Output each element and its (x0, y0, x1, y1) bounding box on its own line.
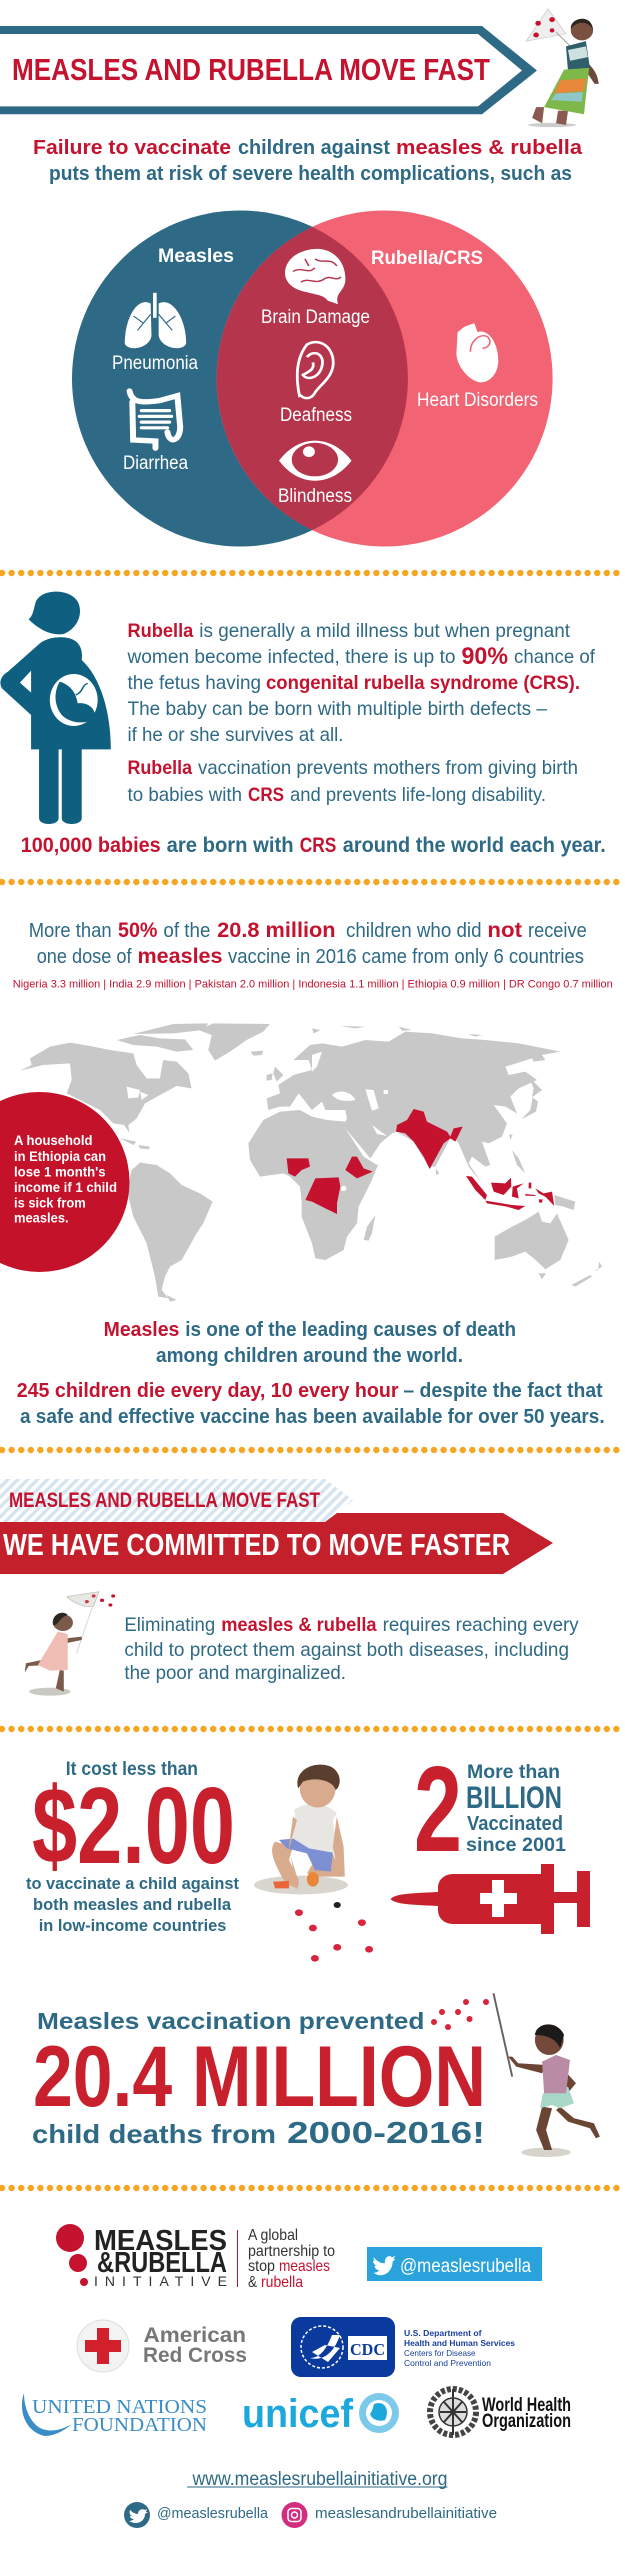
text block: six countries: 50% (118, 919, 158, 942)
panel: lives saved: Measles vaccination prevented (37, 2008, 424, 2034)
text block: eliminating: Eliminating (124, 1614, 215, 1636)
text block: intro: puts them at risk of severe health complications, such as (49, 162, 572, 185)
map: europe, africa, asia and oceania (248, 1026, 602, 1287)
title: MEASLES AND RUBELLA MOVE FAST (12, 53, 490, 87)
text block: leading cause of death: 245 children die every day, 10 every hour (17, 1380, 399, 1402)
text block: intro (33, 136, 583, 185)
chart: world map (20, 1023, 602, 1302)
logo: cdc and hhs: U.S. Department of (404, 2328, 482, 2338)
callout: babies per year: are born with (167, 833, 294, 857)
country list: Nigeria 3.3 million | India 2.9 million | Pakistan 2.0 million | Indonesia 1.1 million | Ethiopia 0.9 million | DR Congo 0.7 million (13, 979, 613, 991)
text block: rubella explanation: if he or she survives at all. (128, 724, 344, 746)
icon: syringe (391, 1864, 590, 1934)
subheading: MEASLES AND RUBELLA MOVE FAST (9, 1488, 320, 1512)
text block: six countries: 20.8 million (217, 919, 336, 942)
text block: six countries: More than (29, 920, 112, 942)
label: diarrhea: Diarrhea (123, 453, 188, 474)
heading: WE HAVE COMMITTED TO MOVE FASTER (3, 1528, 510, 1562)
text block: rubella explanation: congenital rubella syndrome (CRS). (266, 672, 580, 694)
label: pneumonia: Pneumonia (112, 353, 198, 374)
logo: cdc and hhs (291, 2317, 515, 2377)
text block: rubella explanation: Rubella (128, 757, 192, 779)
icon: lungs (125, 293, 186, 348)
panel: measles rubella initiative logo (56, 2224, 335, 2291)
label: blindness: Blindness (278, 486, 352, 507)
logo: united nations foundation (22, 2393, 207, 2436)
text block: six countries: not (487, 919, 522, 942)
illustration: girl with butterfly net (25, 1592, 115, 1696)
text block: six countries (13, 919, 613, 991)
callout: babies per year: CRS (300, 833, 336, 857)
panel: measles rubella initiative logo: MEASLES (94, 2225, 227, 2257)
big number: cost: $2.00 (32, 1765, 235, 1887)
panel: lives saved (32, 1999, 489, 2150)
logo: cdc and hhs: Control and Prevention (404, 2358, 491, 2368)
label: heart disorders: Heart Disorders (417, 390, 538, 411)
text block: leading cause of death: is one of the leading causes of death (185, 1319, 516, 1341)
banner arrow outline (0, 26, 537, 114)
logo: united nations foundation: FOUNDATION (72, 2414, 207, 2436)
big number: two: 2 (414, 1741, 462, 1877)
callout: ethiopia household: lose 1 month's (14, 1164, 106, 1180)
text block: leading cause of death: – despite the fact that (403, 1380, 603, 1402)
logo: american red cross (77, 2320, 247, 2372)
red arrow (0, 1513, 553, 1574)
icon: intestine (130, 391, 180, 448)
panel: two billion vaccinated: BILLION (466, 1779, 562, 1815)
social: twitter (124, 2502, 269, 2528)
panel: measles rubella initiative logo: measles (279, 2258, 330, 2275)
label: rubella: Rubella/CRS (371, 248, 483, 269)
panel: cost stat: to vaccinate a child against (26, 1874, 239, 1893)
social: instagram (282, 2502, 497, 2528)
panel: two billion vaccinated: since 2001 (466, 1834, 566, 1856)
panel: lives saved: child deaths from (32, 2119, 276, 2149)
panel: measles rubella initiative logo: partnership to (248, 2243, 335, 2260)
icon: ear (297, 342, 333, 398)
chart: venn diagram (72, 210, 553, 546)
panel: lives saved: 2000-2016! (287, 2115, 485, 2150)
panel: two billion vaccinated (391, 1741, 590, 1934)
text block: six countries: vaccine in 2016 came from only 6 countries (228, 946, 584, 968)
callout: ethiopia household: in Ethiopia can (14, 1148, 106, 1164)
text block: rubella explanation: vaccination prevents mothers from giving birth (198, 757, 578, 779)
text block: intro: children against (238, 136, 390, 159)
text block: rubella explanation: the fetus having (128, 672, 261, 694)
button: twitter handle: @measlesrubella (400, 2256, 531, 2277)
highlight: nigeria (287, 1158, 310, 1177)
icon: brain (285, 249, 345, 304)
logo: unicef: unicef (242, 2392, 354, 2436)
illustration: running boy (493, 1993, 600, 2157)
logo: american red cross: American (144, 2324, 246, 2347)
text block: six countries: one dose of (37, 946, 132, 968)
panel: two billion vaccinated: Vaccinated (467, 1813, 563, 1835)
text block: rubella explanation (127, 620, 596, 806)
text block: six countries: measles (138, 945, 222, 968)
panel: measles rubella initiative logo: &RUBELLA (97, 2247, 227, 2279)
logo: world health organization (430, 2389, 571, 2435)
link: website: www.measlesrubellainitiative.org (192, 2469, 448, 2490)
text block: six countries: receive (528, 920, 587, 942)
panel: cost stat: in low-income countries (39, 1916, 226, 1935)
panel: measles rubella initiative logo: INITIATIVE (94, 2273, 227, 2289)
text block: eliminating: child to protect them against both diseases, including (124, 1639, 569, 1661)
text block: six countries: of the (163, 920, 210, 942)
text block: rubella explanation: Rubella (128, 620, 193, 642)
label: brain damage: Brain Damage (261, 307, 370, 328)
panel: cost stat: It cost less than (66, 1759, 198, 1780)
label: measles: Measles (158, 246, 234, 267)
text block: eliminating (124, 1614, 579, 1684)
logo: cdc and hhs: Health and Human Services (404, 2338, 515, 2348)
button: twitter handle (367, 2247, 542, 2281)
panel: cost stat: both measles and rubella (33, 1895, 232, 1914)
callout: ethiopia household (0, 1092, 130, 1272)
callout: ethiopia household: A household (14, 1132, 92, 1148)
callout: ethiopia household: is sick from (14, 1194, 86, 1210)
callout: babies per year (21, 833, 606, 857)
text block: eliminating: requires reaching every (383, 1614, 579, 1636)
text block: rubella explanation: 90% (462, 643, 508, 670)
text block: six countries: children who did (346, 920, 482, 942)
callout: ethiopia household: measles. (14, 1210, 69, 1226)
icon: eye (279, 441, 352, 481)
illustration: girl with net (526, 9, 599, 127)
panel: measles rubella initiative logo: rubella (261, 2274, 303, 2291)
text block: intro: measles & rubella (396, 136, 583, 159)
logo: american red cross: Red Cross (143, 2344, 247, 2367)
text block: rubella explanation: CRS (248, 784, 284, 806)
text block: leading cause of death: a safe and effective vaccine has been available for over 50 years. (20, 1406, 605, 1428)
social: twitter: @measlesrubella (157, 2505, 269, 2522)
logo: united nations foundation: UNITED NATIONS (32, 2396, 207, 2418)
panel: measles rubella initiative logo: stop (248, 2258, 275, 2275)
big number: 20.4 million: 20.4 MILLION (33, 2029, 486, 2125)
text block: intro: Failure to vaccinate (33, 136, 231, 159)
callout: babies per year: 100,000 babies (21, 833, 161, 857)
icon: heart (456, 323, 498, 382)
social: instagram: measlesandrubellainitiative (315, 2505, 497, 2522)
text block: rubella explanation: women become infected, there is up to (127, 646, 456, 668)
callout: ethiopia household: income if 1 child (14, 1179, 117, 1195)
panel: measles rubella initiative logo: A global (248, 2227, 298, 2244)
highlight: indonesia (466, 1176, 554, 1210)
logo: world health organization: Organization (482, 2410, 571, 2432)
hatched arrow (0, 1479, 353, 1522)
panel: two billion vaccinated: More than (467, 1762, 560, 1783)
text block: rubella explanation: to babies with (128, 784, 242, 806)
logo: world health organization: World Health (482, 2394, 571, 2416)
highlight: india and pakistan (396, 1109, 463, 1169)
text block: leading cause of death: among children around the world. (156, 1345, 463, 1367)
highlight: dr congo (305, 1177, 340, 1214)
text block: eliminating: the poor and marginalized. (124, 1662, 346, 1684)
text block: rubella explanation: The baby can be born with multiple birth defects – (128, 698, 547, 720)
text block: rubella explanation: is generally a mild illness but when pregnant (199, 620, 571, 642)
panel: measles rubella initiative logo: & (248, 2274, 257, 2291)
text block: rubella explanation: and prevents life-long disability. (290, 784, 546, 806)
map: americas and atlantic (20, 1023, 283, 1302)
panel: header banner (0, 9, 599, 127)
callout: babies per year: around the world each year. (343, 833, 606, 857)
panel: commitment banners (0, 1479, 553, 1574)
text block: leading cause of death (17, 1319, 605, 1428)
illustration: crouching boy (254, 1765, 373, 1962)
text block: leading cause of death: Measles (104, 1319, 179, 1341)
panel: cost stat (26, 1759, 239, 1935)
text block: rubella explanation: chance of (514, 646, 596, 668)
logo: cdc and hhs: CDC (350, 2340, 385, 2359)
icon: pregnant woman (0, 592, 111, 824)
highlight: ethiopia (345, 1157, 373, 1178)
text block: eliminating: measles & rubella (221, 1614, 377, 1636)
label: deafness: Deafness (280, 405, 352, 426)
logo: cdc and hhs: Centers for Disease (404, 2348, 476, 2358)
